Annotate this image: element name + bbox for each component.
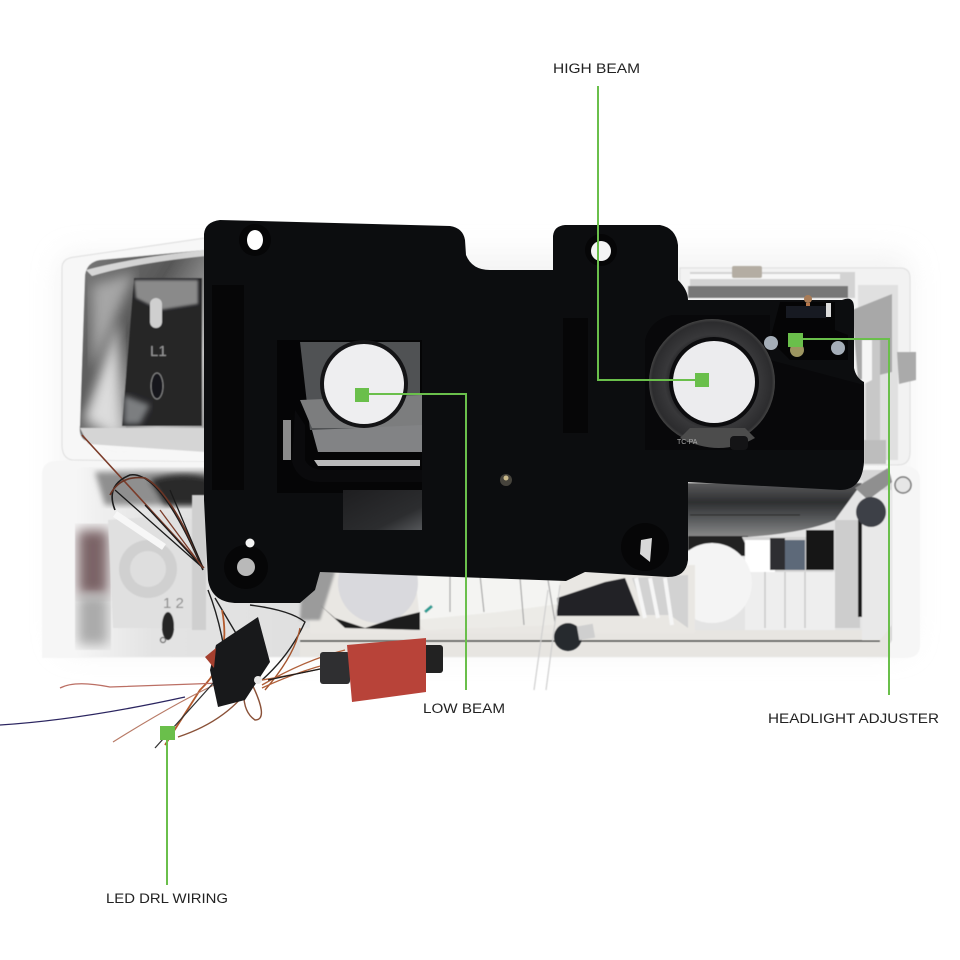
callout: high beam: HIGH BEAM [553,61,640,76]
lamp assembly photo [0,220,920,748]
low beam window [277,326,430,530]
lens cap right [672,543,752,623]
black mounting bracket [204,220,864,603]
red ballast box [320,638,443,702]
mounting holes [224,224,669,589]
upper clear lens: left [62,238,205,462]
upper chrome housing: right [680,266,916,465]
callout: headlight adjuster: HEADLIGHT ADJUSTER [768,711,939,726]
callout: LED DRL wiring [106,726,228,906]
control module [205,617,270,707]
high beam recess: TC-PA [677,439,698,446]
bracket centre screw [500,474,512,486]
lower centre section [300,543,695,690]
lens cap centre [338,543,418,623]
soft shadow behind lamp [60,255,910,650]
callout: low beam [355,388,505,716]
callout: low beam: LOW BEAM [423,701,505,716]
label stamped L1: L1 [150,343,167,360]
lower lens body [42,461,920,658]
callout: LED DRL wiring: LED DRL WIRING [106,891,228,906]
callout: high beam [553,61,709,387]
lower right chrome section [672,468,911,640]
low beam lens [324,344,404,424]
adjuster knob bottom [554,623,582,651]
high beam lens [673,341,755,423]
wiring harness [0,435,345,748]
lower left reflector with L2: 1 2 [163,595,184,612]
high beam recess [645,315,864,450]
adjuster knob right [856,497,886,527]
callout: headlight adjuster [768,333,939,726]
lower left reflector with L2 [108,495,206,642]
housing recess shadows [212,285,588,490]
connector and bolts [764,295,848,360]
